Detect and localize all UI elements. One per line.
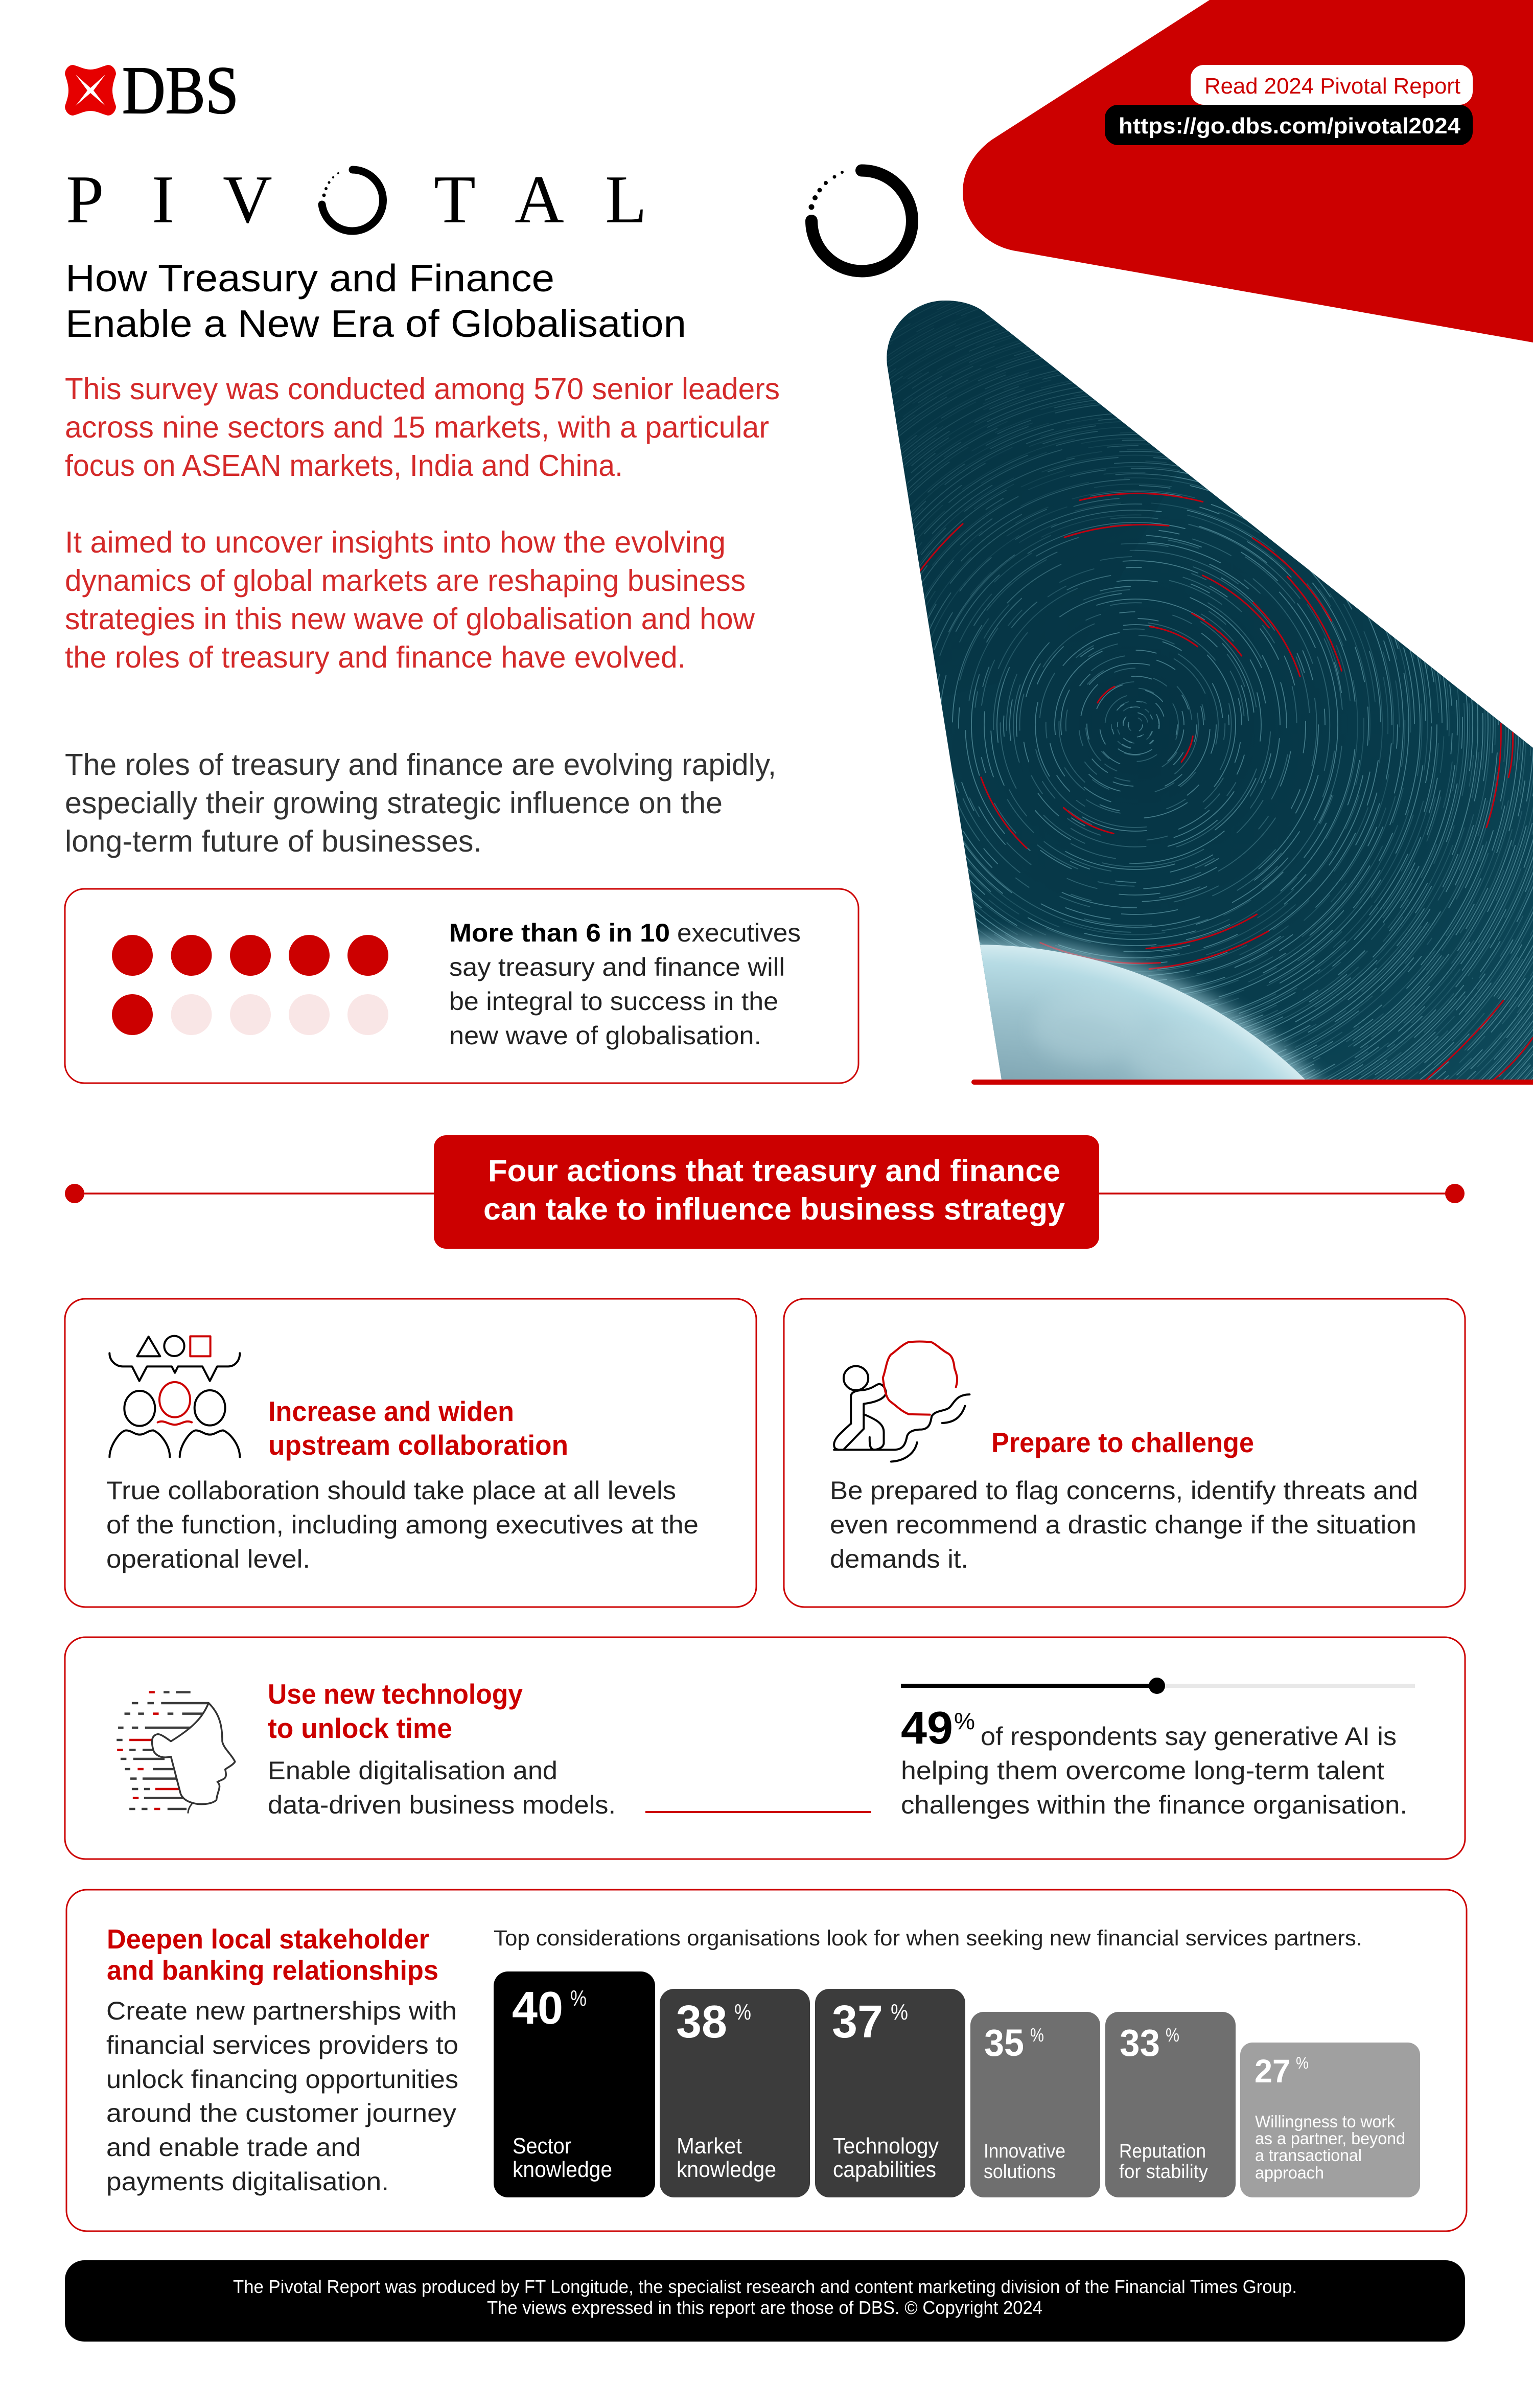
bar: market knowledge 38%: Market	[677, 2134, 742, 2159]
bar: technology capabilities 37%: Technology	[833, 2134, 939, 2159]
bar: willingness to partner 27%: a transactional	[1255, 2146, 1362, 2165]
DBS logo	[65, 52, 239, 128]
bar: willingness to partner 27%	[1240, 2043, 1420, 2197]
intro paragraph 3: especially their growing strategic influence on the	[65, 786, 723, 820]
section heading: four actions	[65, 1135, 1465, 1249]
icon: pushing boulder	[834, 1342, 969, 1461]
heading: and banking relationships	[107, 1955, 438, 1986]
panel: use new technology	[65, 1637, 1465, 1859]
body text: around the customer journey	[106, 2099, 456, 2127]
title	[65, 257, 686, 345]
stat: 49% generative AI: challenges within the finance organisation.	[901, 1791, 1407, 1819]
bar: reputation for stability 33%: Reputation	[1119, 2141, 1206, 2162]
bar: market knowledge 38%: 38	[676, 1997, 727, 2048]
section heading: four actions: Four actions that treasury and finance	[488, 1154, 1060, 1188]
pill: read report	[1191, 65, 1473, 105]
intro paragraph 2: It aimed to uncover insights into how the evolving	[65, 525, 726, 559]
bar: willingness to partner 27%: Willingness to work	[1255, 2112, 1395, 2131]
stat: 49% generative AI: of respondents say generative AI is	[981, 1722, 1397, 1751]
bar: reputation for stability 33%: %	[1166, 2025, 1179, 2046]
icon: collaborating people	[109, 1336, 240, 1457]
body text: demands it.	[830, 1545, 968, 1573]
body text: data-driven business models.	[268, 1791, 616, 1819]
body text: of the function, including among executives at the	[106, 1510, 699, 1539]
intro paragraph 2	[65, 525, 755, 674]
stat text: say treasury and finance will	[449, 953, 785, 981]
chart caption: Top considerations organisations look for when seeking new financial services partners.	[494, 1926, 1362, 1951]
stat text: be integral to success in the	[449, 987, 778, 1016]
stat text: executives	[677, 919, 801, 947]
body text: Be prepared to flag concerns, identify threats and	[830, 1476, 1418, 1505]
intro paragraph 3: long-term future of businesses.	[65, 824, 482, 858]
report link pills	[1105, 65, 1473, 145]
panel: deepen local relationships	[66, 1890, 1467, 2231]
pill: report url	[1105, 105, 1473, 145]
heading: Prepare to challenge	[991, 1427, 1254, 1458]
body text	[106, 1997, 458, 2196]
body text: Enable digitalisation and	[268, 1756, 558, 1785]
bar: sector knowledge 40%	[494, 1971, 655, 2197]
stat: 49% generative AI	[901, 1703, 1407, 1819]
stat: 49% generative AI: %	[954, 1708, 975, 1734]
title: How Treasury and Finance	[65, 257, 554, 300]
body text	[106, 1476, 699, 1573]
heading	[268, 1395, 568, 1461]
stat: 49% generative AI: helping them overcome long-term talent	[901, 1756, 1384, 1785]
heading: Deepen local stakeholder	[107, 1924, 429, 1955]
section heading: four actions: can take to influence business strategy	[483, 1192, 1065, 1226]
red rule under image	[971, 1080, 1533, 1085]
pill: read report: Read 2024 Pivotal Report	[1204, 74, 1460, 99]
bar: technology capabilities 37%: %	[891, 2000, 908, 2025]
bar chart: top considerations	[494, 1971, 1420, 2197]
footer: The views expressed in this report are those of DBS. © Copyright 2024	[487, 2297, 1042, 2318]
bar: sector knowledge 40%: %	[570, 1986, 587, 2011]
body text: financial services providers to	[106, 2031, 458, 2059]
dot grid: 6 of 10	[112, 935, 388, 1035]
body text: payments digitalisation.	[106, 2167, 389, 2196]
stat: 49% generative AI: 49	[901, 1703, 953, 1754]
intro paragraph 3	[65, 748, 776, 858]
bar: innovative solutions 35%: solutions	[984, 2161, 1056, 2183]
bar: market knowledge 38%	[660, 1989, 810, 2197]
heading	[107, 1924, 438, 1986]
logo wordmark: DBS	[122, 52, 239, 128]
panel: 6 in 10 executives	[65, 889, 858, 1083]
bar: technology capabilities 37%	[815, 1989, 965, 2197]
body text	[268, 1756, 616, 1819]
stat text	[449, 919, 801, 1050]
stat text: new wave of globalisation.	[449, 1021, 761, 1050]
bar: technology capabilities 37%: capabilities	[833, 2157, 936, 2182]
heading: Increase and widen	[268, 1395, 514, 1427]
bar: innovative solutions 35%: %	[1030, 2025, 1044, 2046]
wordmark letters: PIVTAL	[66, 162, 647, 237]
bar: sector knowledge 40%: Sector	[513, 2134, 571, 2159]
red corner banner	[963, 0, 1533, 342]
bar: reputation for stability 33%: 33	[1120, 2022, 1160, 2064]
bar: innovative solutions 35%	[970, 2012, 1100, 2197]
intro paragraph 1: focus on ASEAN markets, India and China.	[65, 449, 623, 483]
bar: sector knowledge 40%: knowledge	[513, 2157, 612, 2182]
body text: True collaboration should take place at all levels	[106, 1476, 676, 1505]
icon: DBS red star mark	[65, 65, 116, 116]
body text	[830, 1476, 1418, 1573]
icon: digital head	[117, 1692, 235, 1814]
body text: operational level.	[106, 1545, 310, 1573]
intro paragraph 1: across nine sectors and 15 markets, with a particular	[65, 410, 769, 444]
intro paragraph 1	[65, 372, 780, 483]
bar: innovative solutions 35%: Innovative	[984, 2141, 1065, 2162]
footer	[65, 2260, 1465, 2342]
pill: report url: https://go.dbs.com/pivotal2024	[1119, 113, 1461, 139]
bar: innovative solutions 35%: 35	[984, 2022, 1024, 2064]
heading: Use new technology	[268, 1678, 523, 1710]
bar: reputation for stability 33%	[1105, 2012, 1236, 2197]
icon: ring letter O	[322, 170, 383, 231]
body text: even recommend a drastic change if the situation	[830, 1510, 1416, 1539]
bar: market knowledge 38%: knowledge	[677, 2157, 776, 2182]
body text: and enable trade and	[106, 2133, 361, 2162]
body text: unlock financing opportunities	[106, 2065, 458, 2094]
intro paragraph 2: the roles of treasury and finance have evolved.	[65, 640, 686, 674]
intro paragraph 2: dynamics of global markets are reshaping business	[65, 564, 746, 598]
image: star trails and planet	[887, 301, 1533, 1080]
bar: willingness to partner 27%: 27	[1255, 2053, 1290, 2090]
bar: reputation for stability 33%: for stability	[1119, 2161, 1208, 2183]
panel: prepare to challenge	[784, 1299, 1465, 1607]
bar: market knowledge 38%: %	[734, 2000, 751, 2025]
bar: sector knowledge 40%: 40	[512, 1983, 563, 2034]
red connector	[645, 1811, 871, 1813]
heading: upstream collaboration	[268, 1429, 568, 1461]
PIVOTAL wordmark	[66, 162, 647, 237]
stat text: More than 6 in 10	[449, 919, 670, 947]
progress bar: 49%	[901, 1678, 1415, 1694]
bar: willingness to partner 27%: as a partner, beyond	[1255, 2129, 1405, 2148]
bar: willingness to partner 27%: approach	[1255, 2163, 1324, 2182]
large ring graphic	[808, 170, 912, 271]
title: Enable a New Era of Globalisation	[65, 302, 686, 345]
bar: technology capabilities 37%: 37	[832, 1997, 883, 2048]
panel: upstream collaboration	[65, 1299, 756, 1607]
footer: The Pivotal Report was produced by FT Longitude, the specialist research and content marketing division of the Financial Times Group.	[233, 2276, 1297, 2297]
intro paragraph 3: The roles of treasury and finance are evolving rapidly,	[65, 748, 776, 782]
body text: Create new partnerships with	[106, 1997, 457, 2025]
bar: willingness to partner 27%: %	[1296, 2054, 1309, 2072]
intro paragraph 1: This survey was conducted among 570 senior leaders	[65, 372, 780, 406]
heading: to unlock time	[268, 1712, 452, 1744]
heading	[268, 1678, 523, 1744]
intro paragraph 2: strategies in this new wave of globalisation and how	[65, 602, 755, 636]
